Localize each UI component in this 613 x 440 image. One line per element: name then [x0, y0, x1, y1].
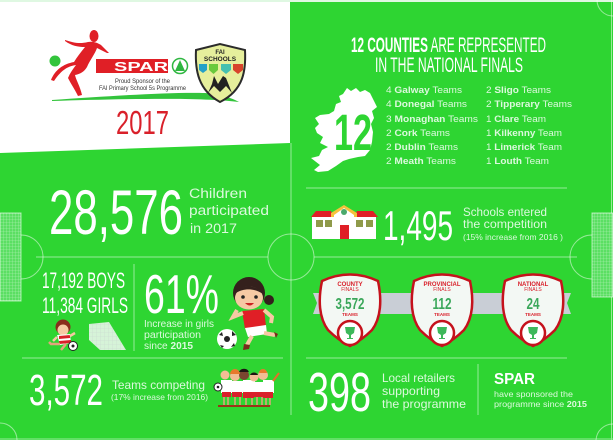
stat: children participated: 28,576 [49, 178, 183, 248]
stat: children participated: in 2017 [190, 221, 237, 236]
heading: counties [351, 34, 546, 77]
icon: trophy [437, 327, 447, 339]
badge: county finals [320, 274, 380, 346]
badge: county finals: TEAMS [342, 312, 358, 317]
list: county teams column 2: 2 Sligo Teams [486, 85, 551, 96]
icon: girl with football [233, 277, 278, 350]
icon: FAI Schools shield [196, 44, 245, 102]
badge: national finals: 24 [526, 296, 540, 313]
stat: schools entered: Schools entered [463, 205, 547, 219]
icon: school building [311, 205, 378, 239]
icon: goal net [89, 322, 126, 350]
stat: girls participation: Increase in girls [144, 319, 214, 330]
sponsor text: FAI Primary School 5s Programme [99, 86, 187, 92]
stat: teams competing: (17% increase from 2016) [111, 392, 208, 402]
stat: children participated: participated [189, 203, 269, 218]
icon: trophy [528, 327, 538, 339]
text: SPAR sponsorship [494, 371, 587, 409]
badge: national finals: TEAMS [525, 312, 541, 317]
list: county teams column 2 [486, 85, 572, 167]
list: county teams column 2: 1 Limerick Team [486, 142, 562, 153]
badge: national finals [503, 274, 563, 346]
stat: girls participation: since 2015 [144, 341, 193, 352]
icon: trophy [345, 327, 355, 339]
icon: red footballer [51, 30, 109, 96]
icon: team of children [214, 369, 279, 407]
stat: teams competing [29, 366, 208, 415]
goal net: right [592, 213, 613, 297]
stat: local retailers: 398 [308, 361, 371, 423]
badge: provincial finals: 112 [432, 296, 452, 313]
list: county teams column 2: 1 Clare Team [486, 114, 546, 125]
stat: teams competing: Teams competing [112, 378, 205, 392]
stat: girls participation [144, 263, 219, 352]
stat: children participated: Children [189, 186, 247, 201]
list: county teams column 1: 2 Dublin Teams [386, 142, 458, 153]
icon: boy kicking ball [49, 320, 78, 350]
year: 2017 [116, 104, 169, 141]
stat: boys and girls [42, 268, 128, 318]
badge: county finals: 3,572 [336, 296, 365, 313]
stat: local retailers: Local retailers [382, 371, 455, 385]
text: SPAR sponsorship: have sponsored the [494, 389, 573, 399]
list: county teams column 2: 2 Tipperary Teams [486, 99, 572, 110]
list: county teams column 2: 1 Kilkenny Team [486, 128, 562, 139]
goal net: left [0, 213, 21, 301]
SPAR logo [96, 58, 188, 74]
icon: football [217, 329, 237, 349]
stat: girls participation: 61% [144, 263, 219, 325]
green swoosh [52, 93, 239, 102]
badge: county finals: FINALS [341, 287, 359, 293]
badge: national finals: FINALS [524, 287, 542, 293]
stat: boys and girls: 17,192 BOYS [42, 268, 125, 293]
badge: county finals: COUNTY [337, 282, 363, 288]
list: county teams column 1 [386, 85, 478, 167]
icon: FAI Schools shield: FAI [215, 50, 225, 56]
list: county teams column 2: 1 Louth Team [486, 156, 549, 167]
stat: teams competing: 3,572 [29, 366, 103, 415]
stat: local retailers: supporting [382, 384, 440, 398]
badge: provincial finals: PROVINCIAL [423, 282, 461, 288]
list: county teams column 1: 2 Cork Teams [386, 128, 450, 139]
badge: national finals: NATIONAL [518, 282, 549, 288]
SPAR logo: SPAR [114, 59, 169, 74]
list: county teams column 1: 3 Monaghan Teams [386, 114, 478, 125]
stat: schools entered: the competition [463, 217, 547, 231]
badge: provincial finals: TEAMS [434, 312, 450, 317]
sponsor text: Proud Sponsor of the [115, 79, 171, 85]
text: SPAR sponsorship: SPAR [494, 371, 535, 388]
sponsor text [99, 79, 187, 92]
stat: local retailers: the programme [382, 397, 466, 411]
badge: provincial finals: FINALS [433, 287, 451, 293]
icon: green ball [50, 56, 60, 66]
stat: schools entered [383, 202, 563, 249]
list: county teams column 1: 4 Galway Teams [386, 85, 462, 96]
text: SPAR sponsorship: programme since 2015 [494, 399, 587, 409]
stat: boys and girls: 11,384 GIRLS [42, 293, 128, 318]
stat: local retailers [308, 361, 466, 423]
icon: map of Ireland with 12 [311, 88, 377, 172]
list: county teams column 1: 2 Meath Teams [386, 156, 456, 167]
icon: FAI Schools shield: SCHOOLS [204, 56, 237, 63]
panel: logo [0, 2, 290, 153]
ribbon [313, 293, 571, 314]
list: county teams column 1: 4 Donegal Teams [386, 99, 467, 110]
icon: map of Ireland with 12: 12 [334, 104, 372, 161]
stat: girls participation: participation [144, 330, 201, 341]
badge: provincial finals [412, 274, 472, 346]
stat: schools entered: 1,495 [383, 202, 453, 249]
stat: schools entered: (15% increase from 2016 ) [463, 232, 563, 242]
